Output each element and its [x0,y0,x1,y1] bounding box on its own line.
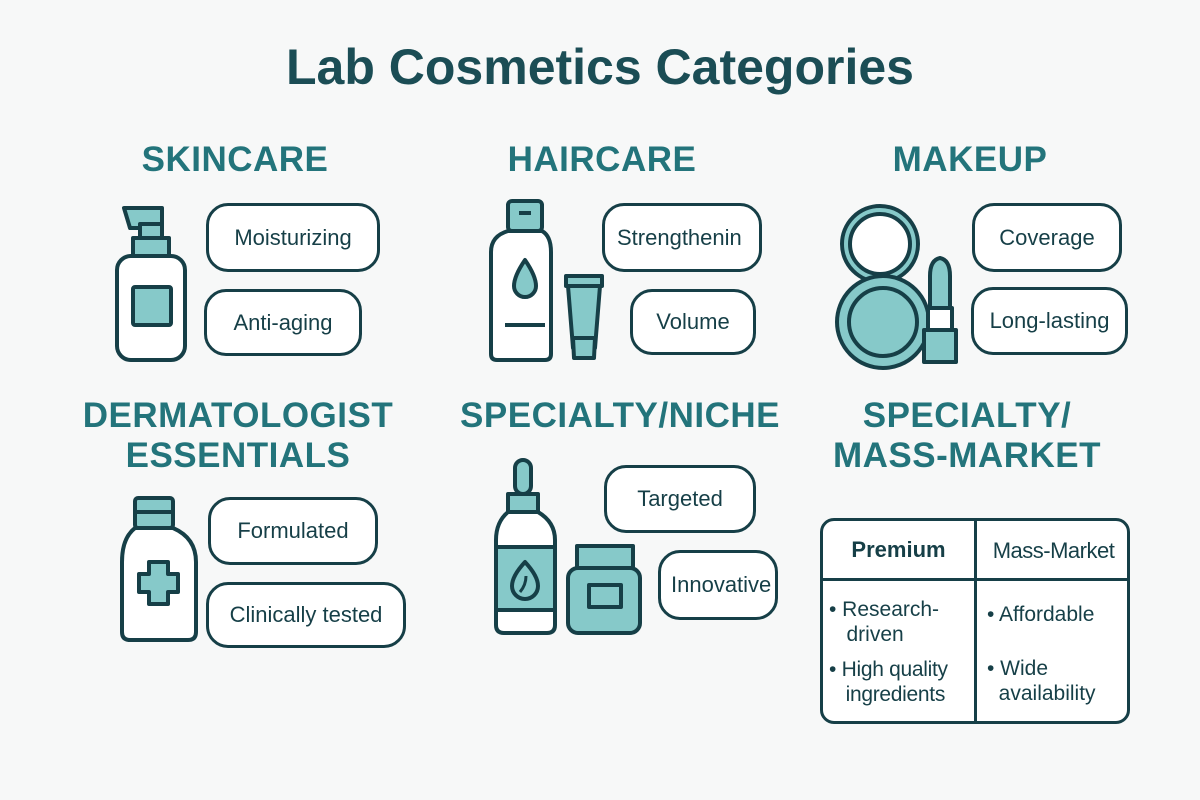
pill: volume: Volume [656,309,730,334]
comparison table: • Affordable [987,603,1094,626]
comparison table: availability [999,682,1096,705]
pill: innovative [658,550,778,620]
heading: specialty/mass-market: SPECIALTY/ [863,396,1071,435]
heading: specialty/niche: SPECIALTY/NICHE [460,396,780,435]
icon: pump bottle [117,208,185,360]
comparison table: • Wide [987,657,1048,680]
pill: strengthenin: Strengthenin [617,224,742,250]
pill: targeted: Targeted [637,486,723,511]
icon: tube [566,276,602,358]
pill: targeted [604,465,756,533]
pill: moisturizing [206,203,380,272]
pill: long-lasting [971,287,1128,355]
pill: volume [630,289,756,355]
heading: specialty/mass-market [833,396,1101,475]
icon: medical bottle [122,498,196,640]
comparison table: • Research- [829,598,939,621]
heading: dermatologist essentials: ESSENTIALS [126,436,350,475]
heading: skincare: SKINCARE [142,140,328,179]
title: Lab Cosmetics Categories [286,39,914,95]
comparison table [820,518,1130,724]
icon: lipstick [924,258,956,362]
icon: dropper bottle [496,460,555,633]
pill: clinically tested: Clinically tested [230,602,382,627]
heading: haircare: HAIRCARE [508,140,696,179]
pill: formulated: Formulated [237,518,349,543]
icon: shampoo bottle [491,201,551,360]
heading: dermatologist essentials [83,396,393,475]
pill: clinically tested [206,582,406,648]
heading: makeup: MAKEUP [893,140,1047,179]
pill: formulated [208,497,378,565]
pill: innovative: Innovative [671,572,771,597]
pill: moisturizing: Moisturizing [234,224,352,250]
icon: compact [837,206,929,368]
pill: coverage: Coverage [999,224,1095,250]
pill: coverage [972,203,1122,272]
pill: anti-aging [204,289,362,356]
heading: dermatologist essentials: DERMATOLOGIST [83,396,393,435]
icon: jar [568,546,640,633]
pill: anti-aging: Anti-aging [233,310,333,334]
heading: specialty/mass-market: MASS-MARKET [833,436,1101,475]
pill: strengthenin [602,203,762,272]
comparison table: Premium [851,537,946,562]
comparison table: driven [846,623,904,646]
comparison table: Mass-Market [993,538,1114,563]
comparison table: • High quality [829,658,948,681]
pill: long-lasting: Long-lasting [990,308,1109,333]
comparison table: ingredients [846,683,945,706]
